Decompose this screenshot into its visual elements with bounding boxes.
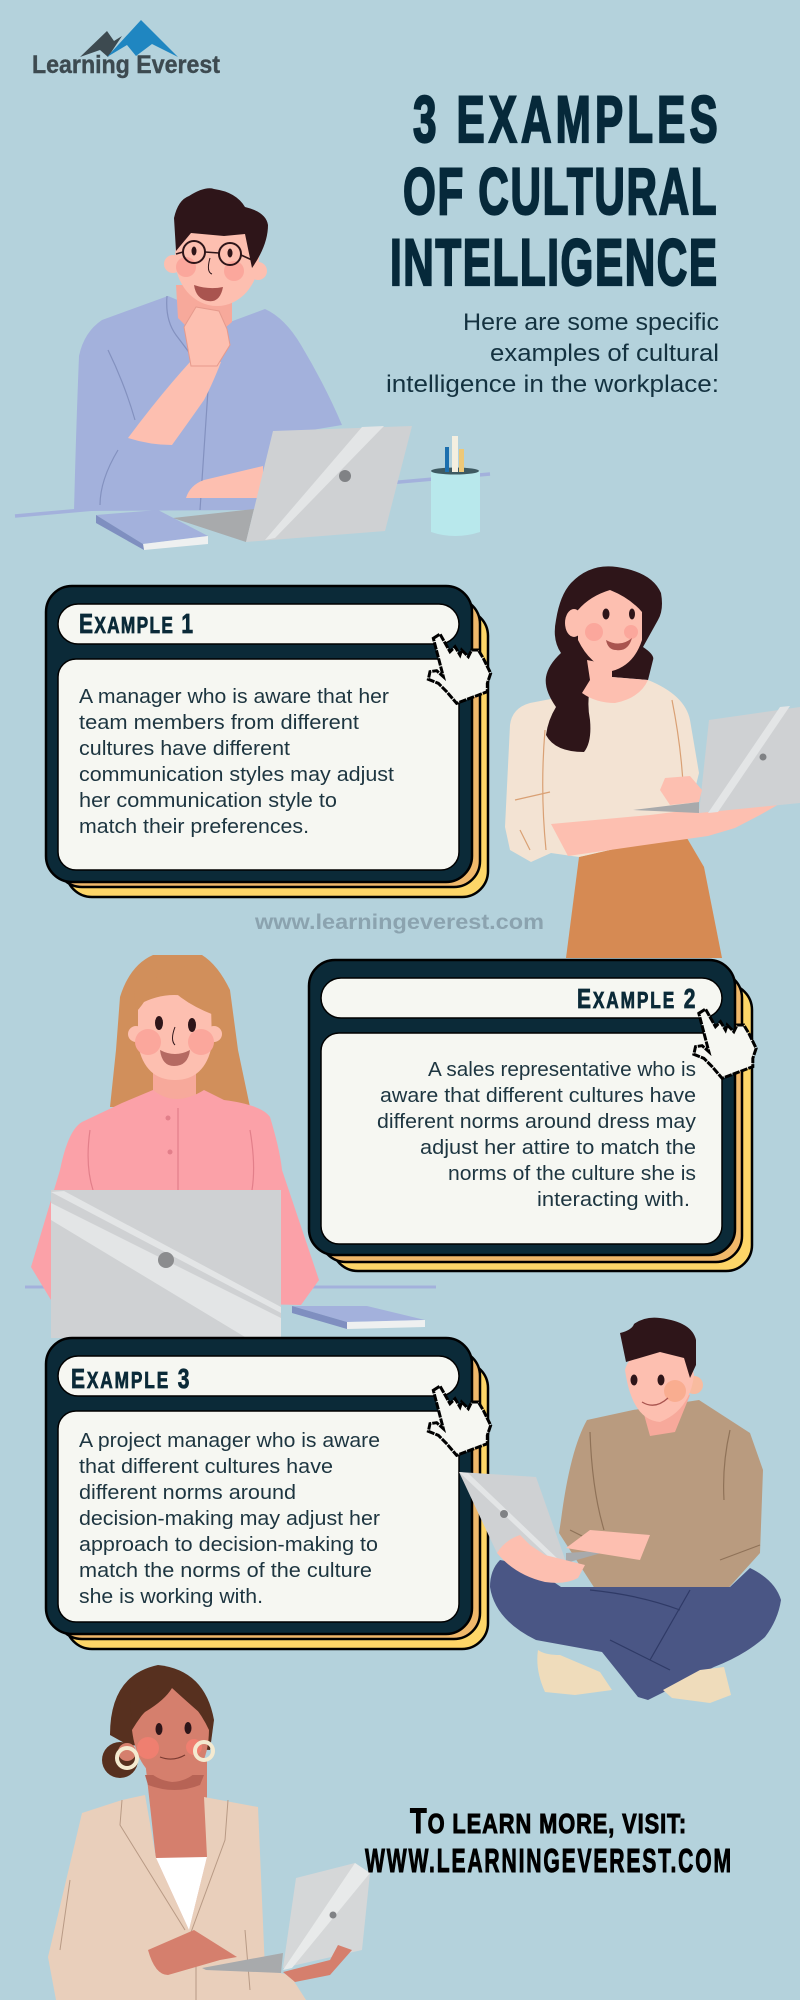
title: INTELLIGENCE [390, 225, 717, 299]
body card: example 2 [321, 1033, 722, 1244]
header pill: example 2: EXAMPLE 2 [577, 984, 696, 1015]
body card: example 3: approach to decision-making to [79, 1534, 378, 1556]
icon: pointer hand [428, 634, 491, 703]
body card: example 3 [58, 1411, 459, 1622]
subtitle: Here are some specific [463, 309, 719, 336]
header pill: example 3 [58, 1356, 459, 1396]
title: OF CULTURAL [403, 154, 717, 228]
body card: example 1: team members from different [79, 712, 359, 734]
illustration: man with glasses at desk [15, 188, 490, 550]
header pill: example 3: EXAMPLE 3 [71, 1364, 190, 1395]
footer call to action: WWW.LEARNINGEVEREST.COM [365, 1842, 731, 1879]
body card: example 1 [58, 659, 459, 870]
title: 3 EXAMPLES [413, 82, 718, 156]
body card: example 1: cultures have different [79, 738, 290, 760]
panel: example 1 [46, 586, 491, 897]
body card: example 3: she is working with. [79, 1586, 263, 1608]
icon: pointer hand [428, 1386, 491, 1455]
illustration: woman in blazer with laptop [48, 1665, 370, 2000]
body card: example 3: that different cultures have [79, 1456, 333, 1478]
body card: example 3: decision-making may adjust her [79, 1508, 380, 1530]
body card: example 2: norms of the culture she is [448, 1163, 696, 1185]
panel: example 3 [46, 1338, 491, 1649]
body card: example 2: adjust her attire to match the [420, 1137, 696, 1159]
header pill: example 1 [58, 604, 459, 644]
body card: example 1: her communication style to [79, 790, 337, 812]
header pill: example 2 [321, 978, 722, 1018]
footer call to action: TO LEARN MORE, VISIT: [410, 1802, 686, 1841]
body card: example 2: interacting with. [537, 1189, 690, 1211]
illustration: woman with long dark hair and laptop [505, 566, 800, 958]
subtitle: examples of cultural [490, 340, 719, 367]
body card: example 1: communication styles may adjust [79, 764, 394, 786]
body card: example 1: A manager who is aware that her [79, 686, 389, 708]
body card: example 3: different norms around [79, 1482, 296, 1504]
watermark url: www.learningeverest.com [254, 911, 544, 934]
illustration: man sitting cross-legged with laptop [459, 1318, 781, 1703]
body card: example 1: match their preferences. [79, 816, 309, 838]
body card: example 2: different norms around dress may [377, 1111, 696, 1133]
icon: pointer hand [694, 1009, 756, 1078]
logo: Learning Everest: Learning Everest [32, 51, 221, 79]
footer call to action [365, 1802, 731, 1879]
illustration: blonde woman with laptop [25, 955, 436, 1338]
body card: example 3: A project manager who is aware [79, 1430, 380, 1452]
subtitle [386, 309, 719, 398]
body card: example 3: match the norms of the culture [79, 1560, 372, 1582]
title [390, 82, 718, 299]
header pill: example 1: EXAMPLE 1 [79, 609, 193, 640]
body card: example 2: A sales representative who is [428, 1059, 696, 1081]
subtitle: intelligence in the workplace: [386, 371, 719, 398]
panel: example 2 [309, 960, 756, 1271]
body card: example 2: aware that different cultures have [380, 1085, 696, 1107]
logo: Learning Everest [32, 20, 221, 79]
